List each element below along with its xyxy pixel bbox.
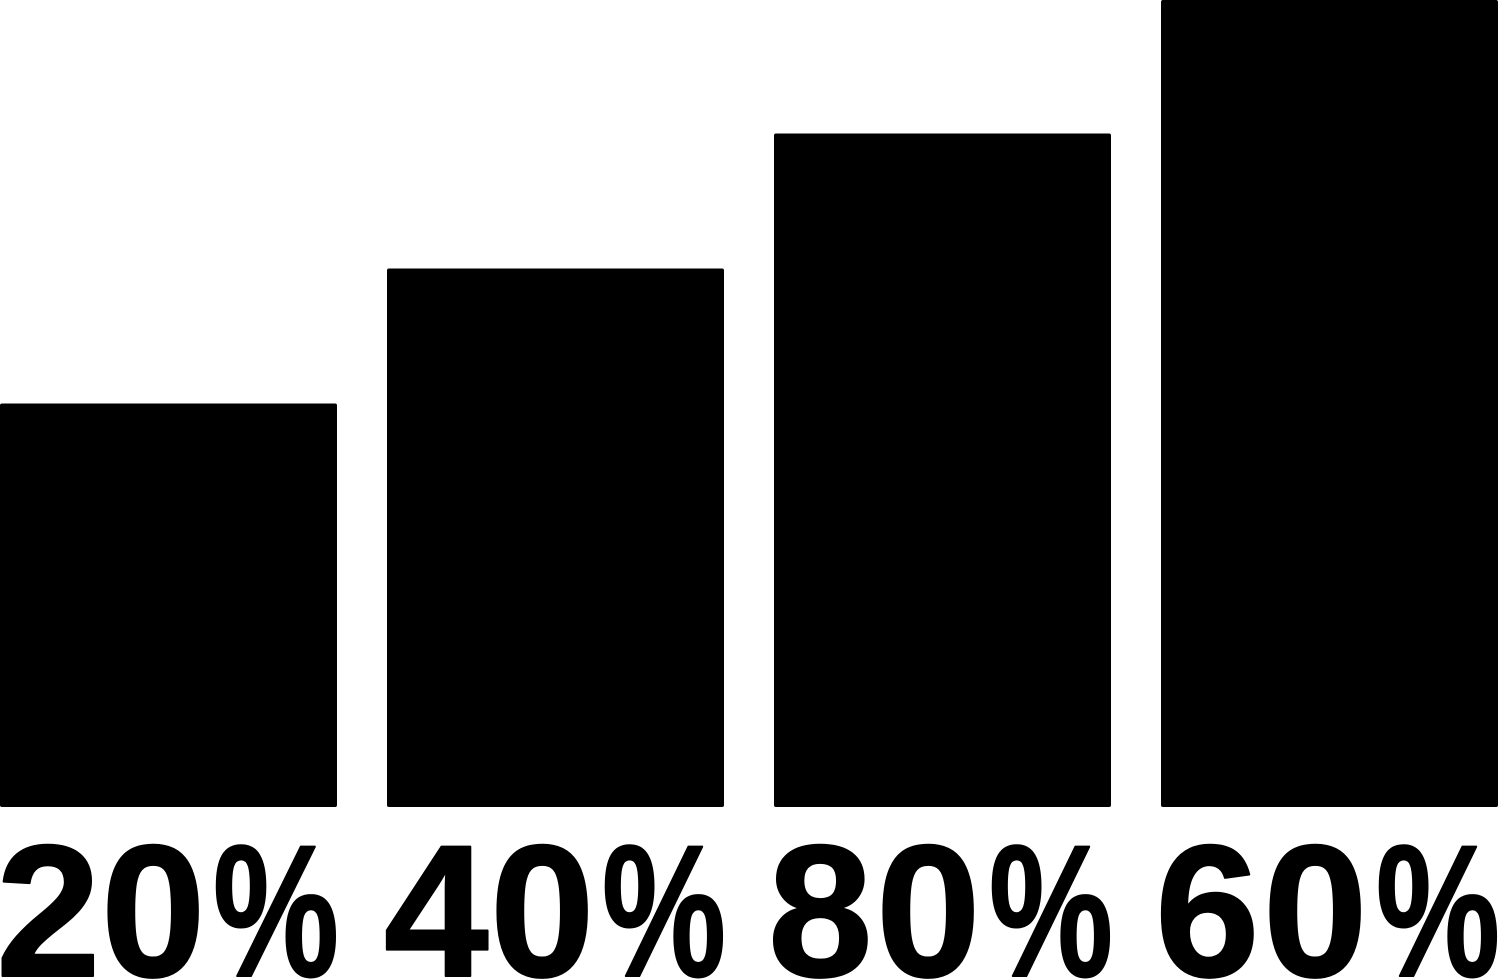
bar: 80%: [774, 134, 1111, 807]
label: 80%: [768, 806, 1113, 980]
label: 20%: [0, 806, 339, 980]
bar: 60%: [1161, 0, 1498, 807]
bar: 20%: [0, 404, 337, 807]
label: 60%: [1155, 806, 1498, 980]
bar: 40%: [387, 268, 724, 807]
label: 40%: [384, 806, 726, 980]
